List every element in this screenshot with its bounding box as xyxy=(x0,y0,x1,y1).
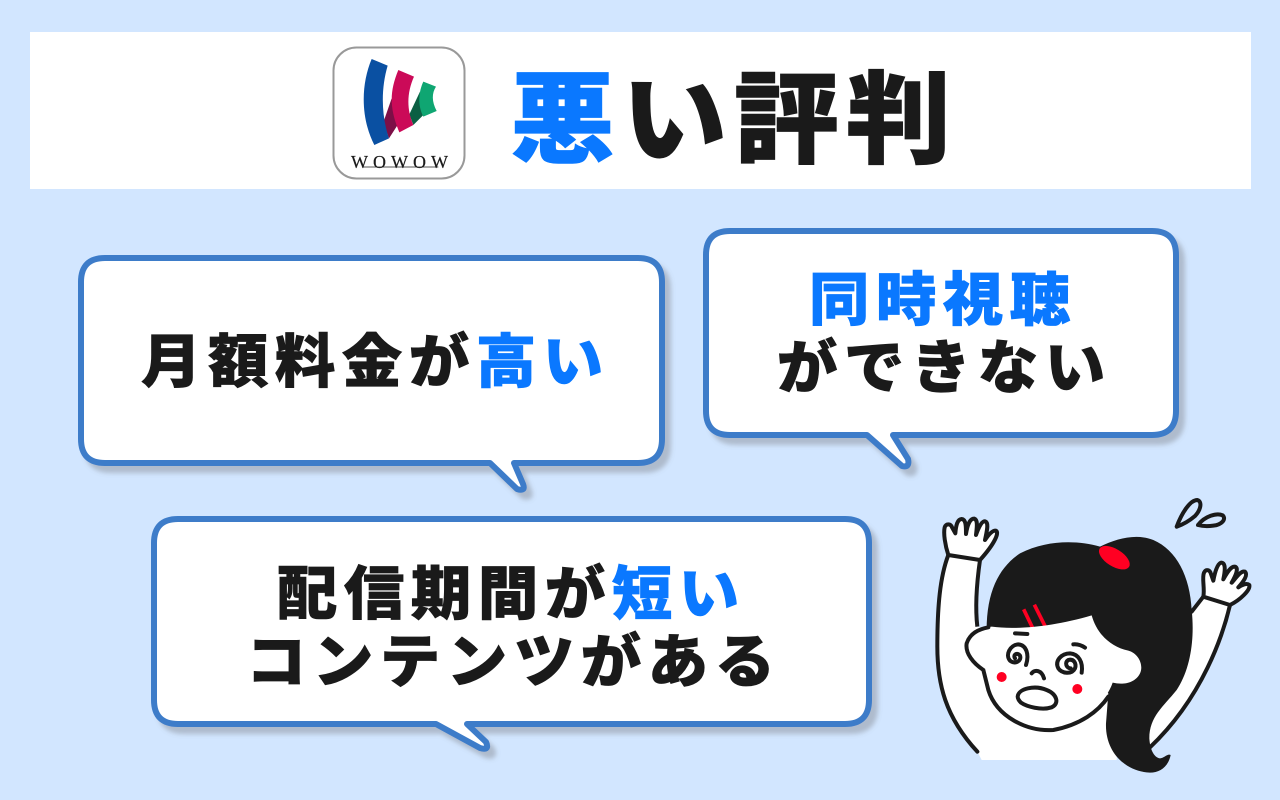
title: 悪い評判 xyxy=(510,64,958,176)
face details xyxy=(1008,633,1085,709)
bubble text: ができない xyxy=(777,335,1112,401)
sweat drops xyxy=(1177,500,1224,527)
hair clips xyxy=(1024,605,1045,628)
hair xyxy=(987,537,1193,773)
face xyxy=(966,615,1141,730)
illustration: dizzy girl xyxy=(937,500,1249,773)
speech bubble: monthly fee xyxy=(81,258,662,490)
bubble text: コンテンツがある xyxy=(246,629,782,695)
bubble text: 配信期間が短い xyxy=(277,561,746,627)
right hand xyxy=(1203,563,1249,605)
icon: WOWOW logo xyxy=(334,48,464,178)
hair tie xyxy=(1095,541,1134,574)
header band xyxy=(30,32,1251,189)
body and left arm xyxy=(937,555,1120,760)
icon: WOWOW logo: WOWOW xyxy=(351,152,453,172)
right arm xyxy=(1140,597,1230,747)
speech bubble: short streaming period xyxy=(154,519,869,749)
speech bubble: simultaneous viewing xyxy=(706,231,1176,466)
cheeks xyxy=(997,672,1007,682)
bubble text: 月額料金が高い xyxy=(141,329,610,395)
bubble text: 同時視聴 xyxy=(809,267,1077,333)
left hand xyxy=(944,519,997,560)
